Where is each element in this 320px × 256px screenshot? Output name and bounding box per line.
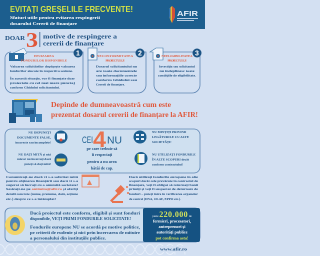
right text 2: NU UTILIZAȚI FONDURILE [152,152,196,156]
icon: handshake [54,154,68,166]
right text 1: SOCIETĂȚI! [152,139,171,144]
panel: concluzie [5,208,200,242]
panel text: Cererii de finanțare. [96,82,125,86]
subtitle: dosarului Cererii de finanțare [10,22,77,26]
subtitle: Sfaturi utile pentru evitarea respingerii [10,16,101,20]
panel text: are toate documentele [96,69,138,73]
icon: money [9,48,27,61]
conclusion text: a personalului din instituțiile publice. [30,236,106,240]
icon: building [150,48,163,60]
callout heading: prezentat dosarul cererii de finanțare la AFIR! [51,112,198,119]
panel: cei 4 nu [5,127,200,173]
website [158,246,189,252]
conclusion text: Dacă proiectul este conform, eligibil și sunt fonduri [30,210,141,216]
right text 2: conform contractului! [152,162,183,166]
panel heading: EPUIZAREA [34,54,55,58]
text block: fonduri europene: finanțare, veți fi obligat să returnați banii [129,183,198,187]
text block: mita: detalii concrete (nume, prenume, dată, acțiune [6,192,79,196]
right text 2: ÎN ALTE SCOPURI decât [152,156,190,162]
cei 4 nu title: NU [107,136,122,146]
text block: mita: pentru obținerea finanțării sau dacă vi s-a [6,179,78,183]
panel text: fondurilor alocate în respectiva sesiune. [10,69,73,73]
cei 4 nu title [82,127,122,152]
text block: fonduri europene: fonduri – puteți intra în verificarea organelor [129,192,199,196]
badge 1: 1 [76,51,80,58]
text block: fonduri europene: primiți și veți fi suspectat de deturnare de [129,187,199,191]
heading: doar 3 motive [5,28,118,52]
panel text: conform Ghidului solicitantului. [10,86,60,90]
cei 4 nu text: bătăi de cap. [91,166,113,170]
conclusion text: pe criterii de rudenie și nici prin încercarea de mituire [30,230,140,235]
text block: fonduri europene: Dacă utilizați fondurile europene în alte [129,175,199,179]
panel text: Valoarea solicitărilor depășește valoarea [10,64,75,68]
heading: doar 3 motive: 3 [26,28,38,52]
panel heading: NEELIGIBILITATEA [162,54,193,58]
badge 2: 2 [138,51,142,58]
text block: mita: Sesizați-ne pe antimita@afir.ro și oferiți [6,187,74,191]
icon: document [88,48,97,60]
background [0,0,205,256]
text block: fonduri europene: scopuri decât cele prevăzute în contractul de [129,179,199,183]
panel heading: FONDURILOR DISPONIBILE [21,58,68,62]
stat box: peste 220.000 de [152,210,192,219]
panel heading: PROIECTULUI [106,58,125,62]
panel text: Investiția sau solicitantul [159,64,195,68]
left text 1: NU DEPUNEȚI [28,130,52,134]
icon: gavel [110,185,129,203]
stat box [143,208,200,242]
panel: neeligibilitatea [150,48,202,93]
stat box: autorități publice [156,230,188,234]
left text 2: NU DAȚI MITĂ și nici [18,152,51,156]
icon: warning document [82,175,99,187]
logo AFIR: AFIR [177,9,199,18]
stat box: antreprenori și [159,224,186,229]
icon: folder [54,130,68,144]
panel text: conform Ghidului sau [96,78,137,82]
website: www.afir.ro [160,246,188,252]
panel text: condițiile de eligibilitate. [158,74,196,78]
stat box: pot confirma asta! [156,236,189,240]
text block: fonduri europene: de control (DNA, OLAF, EPPO etc.). [129,197,181,201]
logo AFIR [169,6,199,23]
panel: fonduri [5,48,83,93]
panel text: În această situație, vor fi finanțate doar [10,76,76,80]
panel text: sau informațiile corecte [96,74,138,78]
cei 4 nu text: pentru a nu avea [87,159,117,164]
left text 2: măcar nu încercați dacă [17,157,51,161]
stat box: fermieri, procesatori, [153,218,191,224]
right text 1: NU MINȚIȚI PRIVIND [152,130,187,134]
conclusion text: Fondurile europene NU se acordă pe motive politice, [30,224,140,230]
icon: network [134,130,146,144]
left text 1: DOCUMENTE FALSE, [17,136,51,140]
heading: doar 3 motive: cererii de finanțare [43,40,104,48]
panel heading: PROIECTULUI [168,58,187,62]
heading: doar 3 motive: motive de respingere a [43,34,118,40]
panel text: nu îndeplinesc toate [160,69,195,73]
title: EVITAȚI GREȘELILE FRECVENTE! [10,4,133,14]
icon: documents [134,152,148,165]
right text 1: LEGĂTURILE CU ALTE [152,134,190,139]
icon: yellow circle [5,215,25,235]
callout heading: Depinde de dumneavoastră cum este [51,102,171,109]
text block: mita: Comunicați-ne dacă vi s-a solicitat mită [6,175,78,179]
cei 4 nu title: 4 [93,127,107,152]
cei 4 nu text: pe care trebuie să [87,146,117,151]
left text 1: incorecte sau incomplete! [15,140,51,144]
illustration: dossier [9,99,42,123]
decorative pattern [0,244,185,254]
panel text: Dosarul solicitantului nu [96,64,137,68]
cei 4 nu text: îi respectați [91,152,113,157]
cei 4 nu title: CEI [82,135,93,145]
left text 2: puteți să dați mită! [24,162,51,166]
header band [0,0,205,29]
panel text: proiectele cu cel mai mare punctaj [10,81,75,85]
text block: mita: etc.) despre ce s-a întâmplat! [6,197,56,201]
conclusion text: disponibile, VEȚI PRIMI FONDURILE SOLICITATE! [30,216,132,221]
panel heading: NECONFORMITATEA [97,54,134,58]
panel: neconformitatea [88,48,146,93]
heading: doar 3 motive: DOAR [5,36,26,42]
badge 3: 3 [195,51,199,58]
text block: mita: sugerat să lucrați cu o anumită societate! [6,183,78,187]
